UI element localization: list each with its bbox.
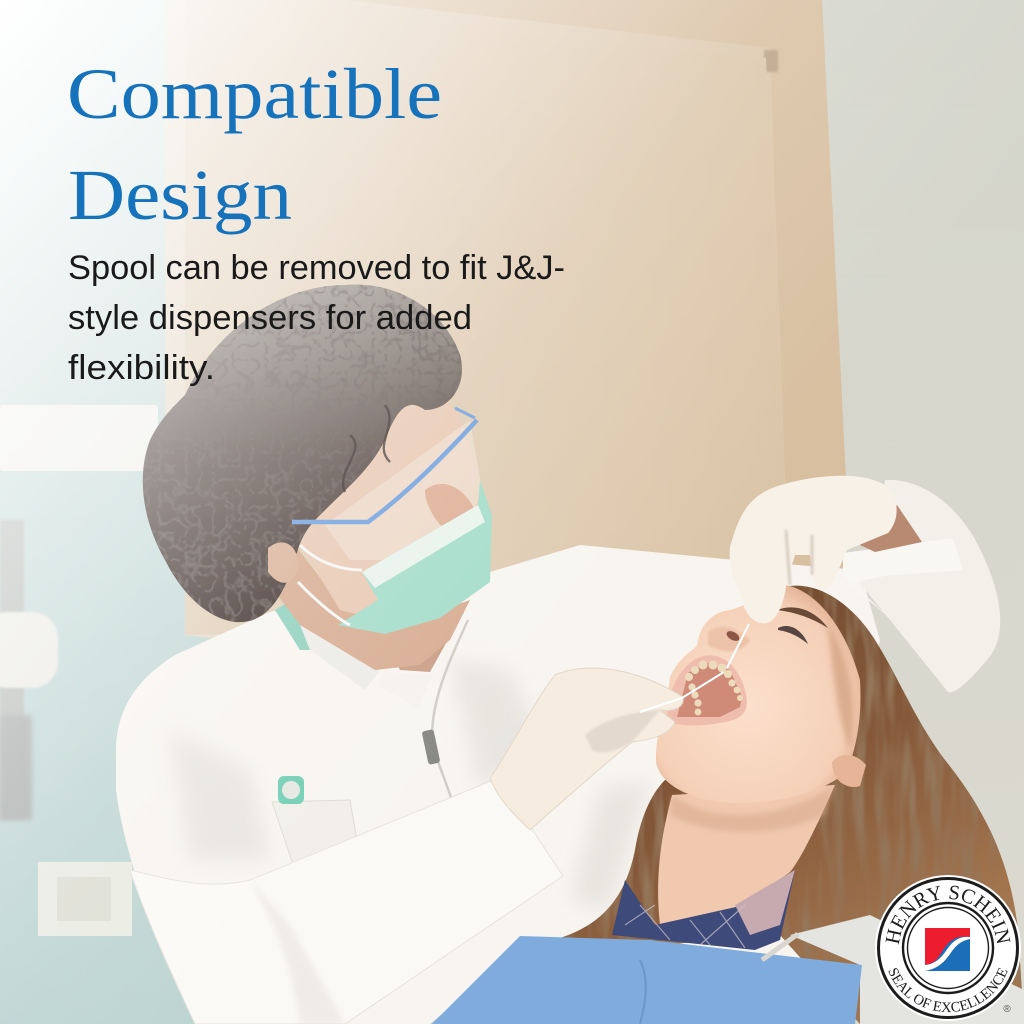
coat collar and undershirt [275,600,460,708]
neck [658,785,835,925]
raised sleeve [843,480,1000,692]
plaid shirt [612,870,795,950]
bib clip [762,934,798,960]
lips and open mouth [667,655,747,725]
zipper [432,620,468,800]
sweater [790,915,1024,1024]
woman's hair [560,586,1024,1024]
registered mark: ® [1003,1004,1011,1015]
dentist's wrist [860,505,922,552]
title: Design [68,155,292,235]
man's ear [268,542,298,583]
forearm sleeve [130,778,563,1024]
lower gloved hand [490,668,683,830]
body text [68,249,565,387]
upper gloved hand [730,476,897,623]
body text: style dispensers for added [68,299,472,337]
seal curved text: SEAL OF EXCELLENCE [888,968,1008,1012]
floss strand [640,624,749,712]
title: Compatible [67,54,442,134]
man's face [299,385,490,625]
loose curls [343,405,390,492]
ear [832,755,866,787]
seal logo square [925,928,970,971]
nose [708,627,750,651]
seal curved text: HENRY SCHEIN [886,886,1010,944]
seal curved text [886,886,1010,1012]
Henry Schein seal badge [875,875,1021,1021]
man's curly hair [143,284,462,622]
woman's clothing [432,870,1024,1024]
blue patient bib [432,936,862,1024]
man's neck [270,545,470,670]
surgical mask [298,480,492,634]
cheek shadow [828,625,853,750]
body text: Spool can be removed to fit J&J- [68,249,565,287]
woman patient [560,585,1024,1024]
eye and brow [777,607,828,644]
dentist [130,284,1000,1024]
body text: flexibility. [68,349,215,387]
title [67,54,442,235]
breast pocket and pen [272,776,362,885]
face shield and glasses [292,408,482,560]
lab coat body [116,545,880,1024]
face [656,585,860,803]
